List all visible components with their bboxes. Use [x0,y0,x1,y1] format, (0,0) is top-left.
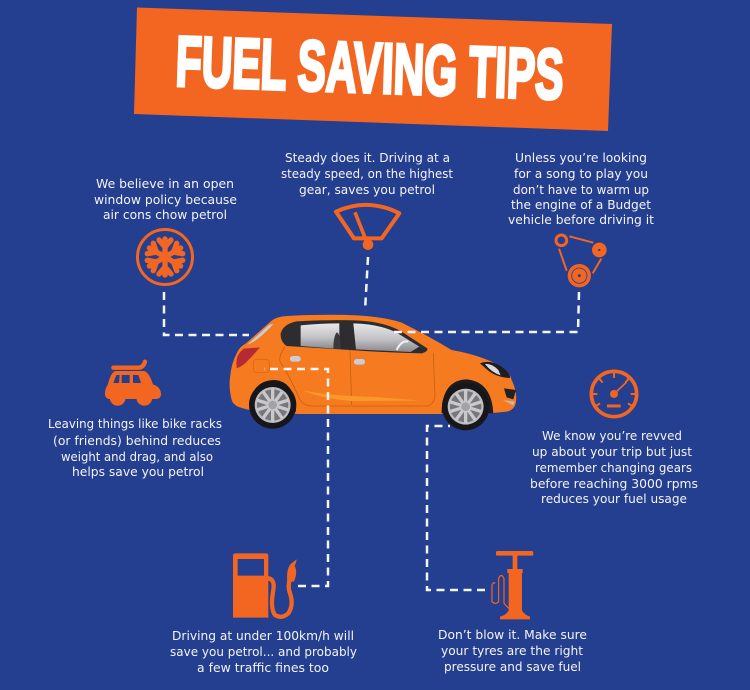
icon: speedometer [591,371,637,417]
text: warm up tip: for a song to play you [514,166,648,181]
text: steady speed tip: Steady does it. Driving at a [285,150,450,165]
car body [230,315,516,414]
text: steady speed tip: steady speed, on the highest [281,166,453,181]
title banner [134,8,612,131]
text: warm up tip: vehicle before driving it [508,212,654,227]
front wheel [442,383,489,430]
text: gear change tip: before reaching 3000 rpms [530,476,698,491]
dashed connector: air con [164,292,249,335]
text: gear change tip: remember changing gears [535,460,692,475]
text: gear change tip: up about your trip but just [532,444,692,459]
rear side glass [301,323,339,349]
text: steady speed tip: gear, saves you petrol [299,182,435,197]
text: roof rack tip: helps save you petrol [72,464,204,479]
text: open window tip: window policy because [94,192,237,207]
dashed connector: fuel pump [264,369,328,586]
headlight [480,362,510,378]
front grille [504,388,516,399]
door handles [290,356,365,365]
text: gear change tip: We know you’re revved [542,428,682,443]
fuel cap [253,359,269,373]
text: gear change tip [530,428,698,506]
body highlight [303,391,420,401]
icon: bicycle tyre pump [492,551,533,619]
steering wheel [397,341,408,350]
text: gear change tip: reduces your fuel usage [541,491,687,506]
text: speed limit tip: save you petrol... and probably [170,644,358,659]
text: speed limit tip: a few traffic fines too [197,660,329,675]
front side glass [353,323,419,352]
text: warm up tip [508,150,654,227]
text: roof rack tip: weight and drag, and also [61,449,213,464]
icon: snowflake air con [138,230,192,284]
rear wheel [249,381,296,429]
text: warm up tip: the engine of a Budget [511,197,651,212]
text: open window tip: air cons chow petrol [103,207,227,222]
tail light [236,347,260,368]
dashed connector: wiper [365,257,368,311]
rear headrest [333,332,341,349]
text: roof rack tip [48,416,222,479]
side window frame [281,320,427,353]
icon: fuel pump [233,553,297,618]
text: roof rack tip: Leaving things like bike racks [48,416,222,431]
dashed connector: tyre pump [427,426,485,590]
text: tyre pressure tip: your tyres are the right [441,643,583,658]
text: tyre pressure tip: Don’t blow it. Make sure [438,627,587,642]
text: warm up tip: Unless you’re looking [515,150,647,165]
icon: engine belt pulleys [556,235,607,287]
text: roof rack tip: (or friends) behind reduces [53,433,221,448]
text: speed limit tip: Driving at under 100km/h will [172,628,354,643]
icon: car with roof rack [105,362,161,406]
car [230,315,516,430]
door seams [280,347,435,406]
text: tyre pressure tip: pressure and save fuel [444,659,581,674]
wheel arches [250,379,493,413]
text: open window tip [94,176,237,222]
text: tyre pressure tip [438,627,587,674]
rear window [247,324,273,345]
text: speed limit tip [170,628,358,675]
text: open window tip: We believe in an open [96,176,234,191]
dashed connector: engine belt [390,292,579,332]
text: warm up tip: don’t have to warm up [513,182,649,197]
icon: windscreen wiper [336,205,399,250]
text: steady speed tip [281,150,453,197]
